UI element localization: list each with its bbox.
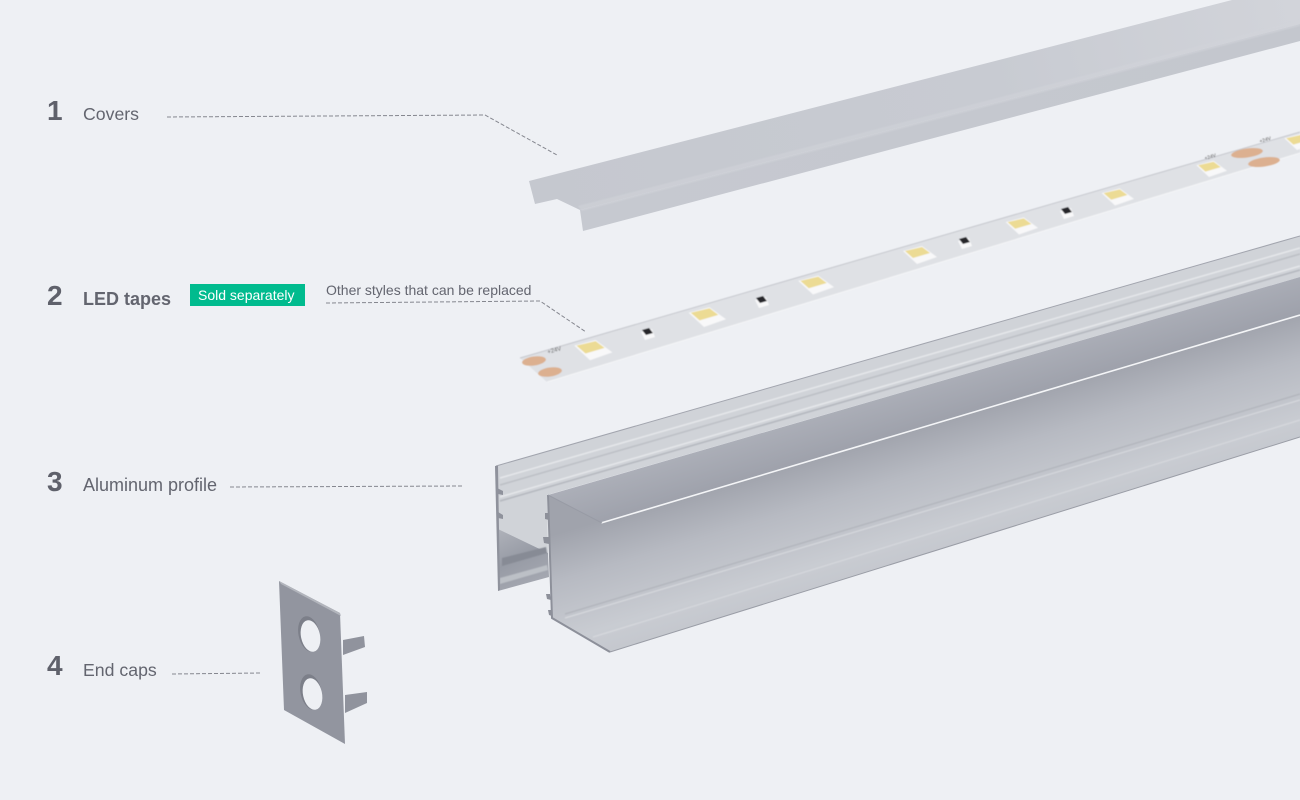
LED chips — [574, 134, 1300, 360]
callout 2: LED tapes: 2 — [47, 280, 63, 311]
front end edge — [548, 495, 610, 652]
callout 4: End caps — [47, 650, 260, 681]
copper pads — [521, 146, 1280, 378]
callout 3: Aluminum profile: Aluminum profile — [83, 475, 217, 495]
back wall hooks — [497, 488, 503, 495]
badge: sold separately: Sold separately — [198, 287, 295, 303]
callout 2: LED tapes — [47, 280, 586, 332]
front face — [548, 315, 1300, 652]
component: end cap — [279, 581, 367, 744]
holes — [295, 614, 323, 654]
callout 2: LED tapes: Other styles that can be replaced — [326, 282, 531, 298]
prongs — [343, 636, 365, 655]
badge: sold separately — [190, 284, 305, 306]
flange top — [548, 277, 1300, 523]
resistors — [641, 207, 1074, 340]
callout 3: Aluminum profile: 3 — [47, 466, 63, 497]
callout 1: Covers: Covers — [83, 104, 139, 124]
bright fold line — [601, 315, 1300, 523]
component: LED tape — [520, 132, 1300, 382]
component: aluminum profile — [495, 236, 1300, 652]
back wall band — [495, 236, 1300, 553]
component: LED tape: +24V — [1259, 136, 1273, 145]
component: cover — [529, 0, 1300, 231]
component: LED tape: +24V — [1204, 153, 1218, 162]
channel interior — [498, 529, 549, 591]
callout 1: Covers — [47, 95, 557, 155]
callout 3: Aluminum profile — [47, 466, 462, 497]
plate — [279, 581, 345, 744]
voltage marks: +24V — [547, 346, 562, 356]
callout 1: Covers: 1 — [47, 95, 63, 126]
callout 2: LED tapes: LED tapes — [83, 289, 171, 309]
left edge — [495, 466, 500, 591]
lower ridges — [565, 394, 1300, 637]
callout 4: End caps: End caps — [83, 660, 157, 680]
callout 4: End caps: 4 — [47, 650, 63, 681]
front edge hooks — [543, 513, 552, 616]
